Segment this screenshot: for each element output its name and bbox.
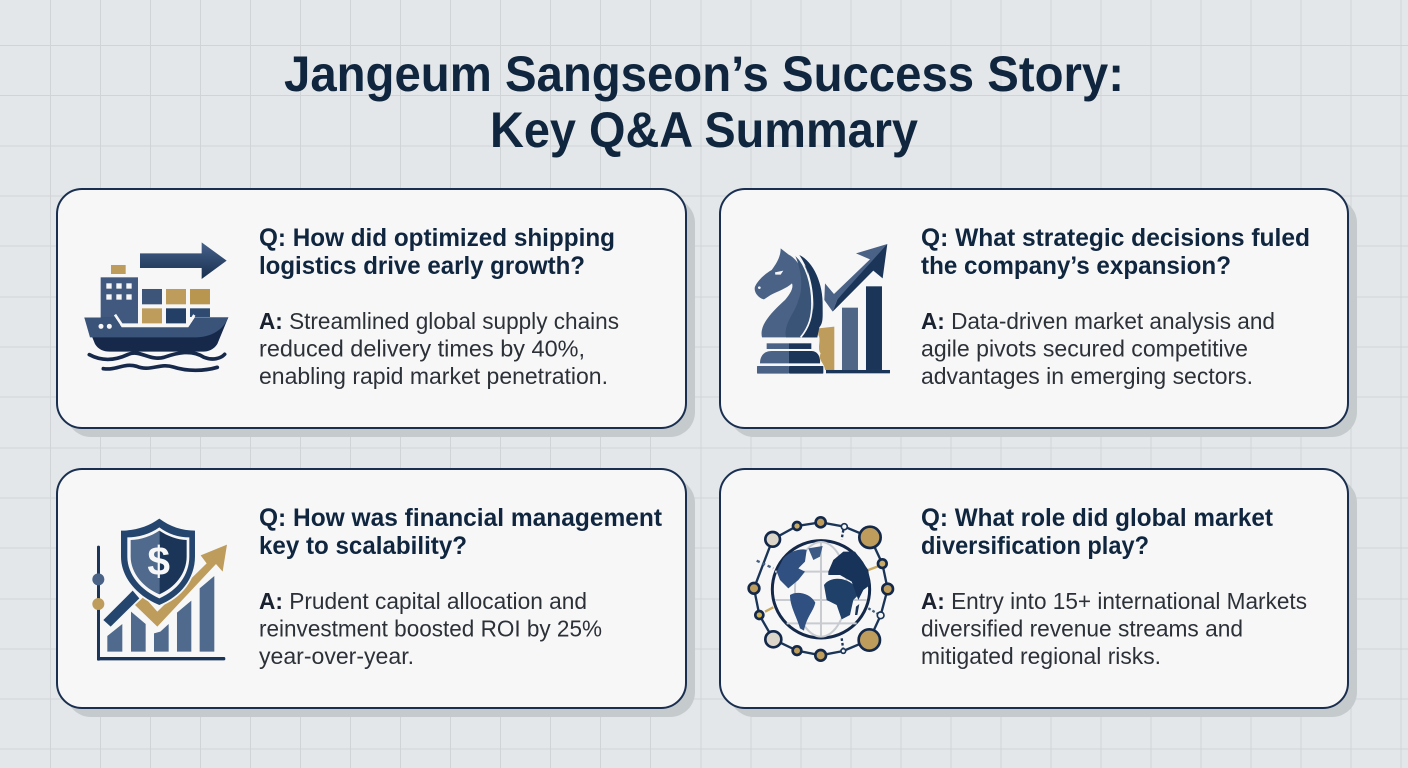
answer: mitigated regional risks. [921,643,1161,669]
answer: year-over-year. [259,643,414,669]
panel: shipping logistics [57,189,695,437]
answer: advantages in emerging sectors. [921,363,1253,389]
answer: A: Prudent capital allocation and [259,588,587,614]
question [921,224,1310,280]
answer: reduced delivery times by 40%, [259,336,585,362]
question: Q: How was financial management [259,504,663,532]
icon: cargo ship with arrow [84,242,228,370]
question [259,224,615,280]
question: diversification play? [921,532,1149,560]
icon: chess knight with rising bars [755,244,890,374]
answer: agile pivots secured competitive [921,336,1248,362]
panel: financial management [57,469,695,717]
question: Q: How did optimized shipping [259,224,615,252]
answer: A: Entry into 15+ international Markets [921,588,1307,614]
question [259,504,663,560]
question: logistics drive early growth? [259,252,585,280]
answer: A: Streamlined global supply chains [259,308,619,334]
icon: shield with dollar and growth chart: $ [147,538,170,584]
answer: enabling rapid market penetration. [259,363,608,389]
title: Key Q&A Summary [490,102,918,158]
question: Q: What role did global market [921,504,1274,532]
title: Jangeum Sangseon’s Success Story: [284,46,1124,102]
question: the company’s expansion? [921,252,1231,280]
title [284,46,1124,158]
answer: A: Data-driven market analysis and [921,308,1275,334]
answer [259,308,619,389]
question: key to scalability? [259,532,467,560]
answer: reinvestment boosted ROI by 25% [259,616,602,642]
icon: shield with dollar and growth chart [92,519,227,661]
question: Q: What strategic decisions fuled [921,224,1310,252]
answer: diversified revenue streams and [921,616,1243,642]
panel: strategic decisions [720,189,1357,437]
answer [921,588,1307,669]
icon: globe with connected nodes [749,517,893,661]
answer [921,308,1275,389]
question [921,504,1274,560]
panel: global diversification [720,469,1357,717]
answer [259,588,602,669]
